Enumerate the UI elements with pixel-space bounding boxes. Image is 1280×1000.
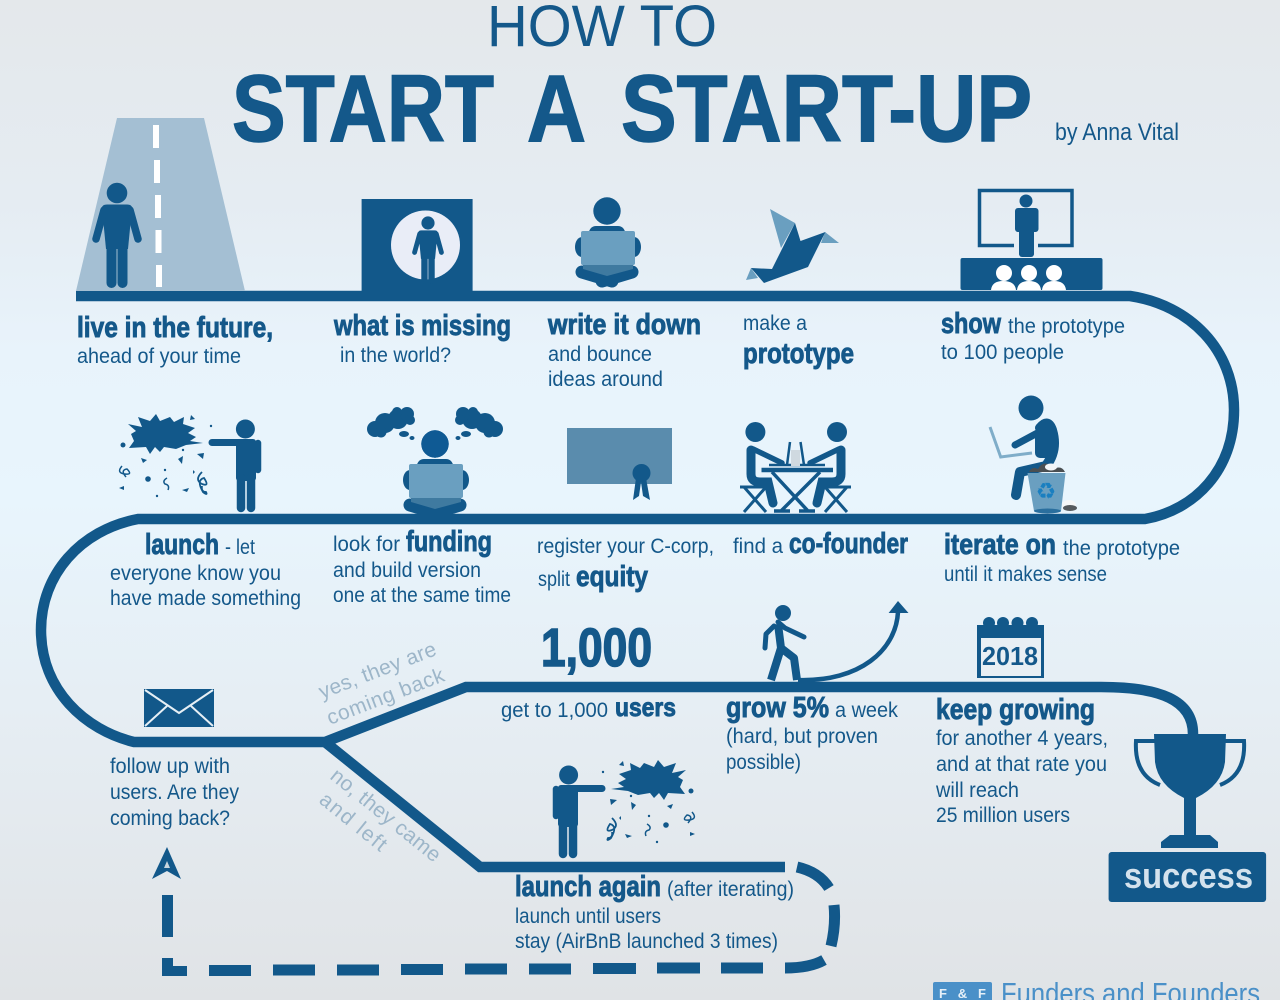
- title line: start a start-up: [232, 56, 1032, 162]
- text: [935, 694, 1108, 827]
- text: [110, 529, 301, 610]
- branch label: yes: yes, they are: [316, 638, 440, 704]
- text: ahead of your time: [77, 345, 241, 368]
- text: [547, 309, 701, 391]
- text: prototype: [743, 338, 854, 370]
- text: have made something: [110, 587, 301, 610]
- icon: calendar 2018: 2018: [982, 641, 1038, 671]
- byline: by Anna Vital: [1055, 119, 1179, 146]
- text: [333, 310, 511, 367]
- text: look for: [333, 533, 400, 556]
- branch label: yes: coming back: [324, 664, 448, 730]
- title line: start a start-up: START-UP: [621, 56, 1032, 162]
- text: write it down: [547, 309, 701, 341]
- text: launch again: [515, 871, 661, 903]
- text: in the world?: [340, 344, 451, 367]
- step: launch again: [515, 760, 794, 953]
- icon: person launching confetti again: [556, 760, 695, 854]
- icon: origami bird: [746, 209, 839, 283]
- text: split: [538, 568, 570, 591]
- text: users. Are they: [110, 781, 239, 804]
- icon: person in a frame: [362, 199, 473, 293]
- icon: person launching confetti: [119, 414, 258, 508]
- text: and build version: [333, 559, 481, 582]
- road path: no branch: [325, 742, 785, 867]
- text: [515, 871, 794, 953]
- text: equity: [576, 561, 648, 593]
- text: keep growing: [936, 694, 1095, 726]
- text: co-founder: [789, 528, 908, 560]
- text: stay (AirBnB launched 3 times): [515, 930, 778, 953]
- step: get to 1,000 users: [501, 618, 676, 722]
- road path: main route: [41, 296, 1234, 742]
- text: users: [615, 692, 676, 722]
- step: what is missing: [333, 199, 511, 367]
- text: grow 5%: [726, 692, 829, 724]
- text: coming back?: [110, 807, 230, 830]
- text: get to 1,000: [501, 699, 608, 722]
- text: [537, 535, 714, 593]
- step: write it down: [547, 197, 701, 391]
- text: what is missing: [333, 310, 511, 342]
- text: [726, 692, 898, 774]
- text: [110, 755, 239, 830]
- step: show the prototype: [941, 190, 1125, 364]
- text: live in the future,: [77, 312, 273, 344]
- text: launch until users: [515, 905, 661, 928]
- step: launch: [110, 414, 301, 610]
- text: register your C-corp,: [537, 535, 714, 558]
- icon: presenter on stage with audience: [960, 190, 1102, 290]
- big number: 1,000: [541, 618, 652, 678]
- step: live in the future: [76, 118, 273, 368]
- text: find a: [733, 535, 783, 558]
- text: [733, 528, 908, 560]
- success label: success: [1124, 855, 1253, 896]
- text: [501, 692, 676, 722]
- text: for another 4 years,: [936, 727, 1108, 750]
- text: - let: [225, 536, 255, 559]
- text: until it makes sense: [944, 563, 1107, 586]
- text: (hard, but proven: [726, 725, 878, 748]
- title: [232, 0, 1179, 162]
- text: show: [941, 308, 1001, 340]
- branch label: yes: [316, 638, 448, 730]
- icon: walking person with growth arrow: [765, 601, 908, 680]
- text: [941, 308, 1125, 364]
- text: and at that rate you: [936, 753, 1107, 776]
- text: possible): [726, 751, 801, 774]
- step: look for funding: [333, 407, 511, 607]
- title line: start a start-up: START: [232, 56, 494, 162]
- icon: person with laptop on recycling bin: ♻: [1036, 479, 1056, 505]
- step: make a prototype: [743, 209, 854, 370]
- success: trophy and label: [1109, 734, 1266, 902]
- text: a week: [835, 699, 898, 722]
- text: iterate on: [944, 529, 1056, 561]
- icon: person with laptop: [575, 197, 641, 281]
- text: (after iterating): [667, 878, 794, 901]
- step: grow 5% a week: [726, 601, 908, 774]
- icon: certificate with seal: [567, 428, 672, 500]
- icon: calendar 2018: [977, 617, 1044, 678]
- step: register C-corp: [537, 428, 714, 593]
- text: [743, 312, 854, 370]
- text: funding: [406, 526, 492, 558]
- title line: start a start-up: A: [527, 56, 586, 162]
- text: will reach: [935, 779, 1019, 802]
- text: to 100 people: [941, 341, 1064, 364]
- text: the prototype: [1008, 315, 1125, 338]
- text: one at the same time: [333, 584, 511, 607]
- text: [944, 529, 1180, 586]
- icon: envelope: [144, 689, 214, 727]
- text: [77, 312, 273, 368]
- icon: two people at a table: [740, 422, 851, 512]
- text: 25 million users: [936, 804, 1070, 827]
- step: iterate on the prototype: [944, 396, 1180, 586]
- branch label: no: no, they came: [326, 764, 445, 867]
- step: follow up with users: [110, 689, 239, 830]
- text: the prototype: [1063, 537, 1180, 560]
- text: make a: [743, 312, 807, 335]
- arrowhead: [152, 847, 181, 879]
- icon: road with person: [76, 118, 245, 291]
- text: ideas around: [548, 368, 663, 391]
- branch label: no: and left: [315, 788, 392, 856]
- step: find a co-founder: [733, 422, 908, 560]
- text: and bounce: [548, 343, 652, 366]
- text: [333, 526, 511, 607]
- text: everyone know you: [110, 562, 281, 585]
- text: follow up with: [110, 755, 230, 778]
- text: launch: [145, 529, 219, 561]
- step: keep growing: [935, 617, 1108, 827]
- icon: trophy: [1136, 734, 1244, 848]
- icon: person with laptop on recycling bin: [990, 396, 1077, 514]
- icon: thinking person with laptop: [367, 407, 503, 514]
- road path: dashed return arrow: [152, 847, 835, 976]
